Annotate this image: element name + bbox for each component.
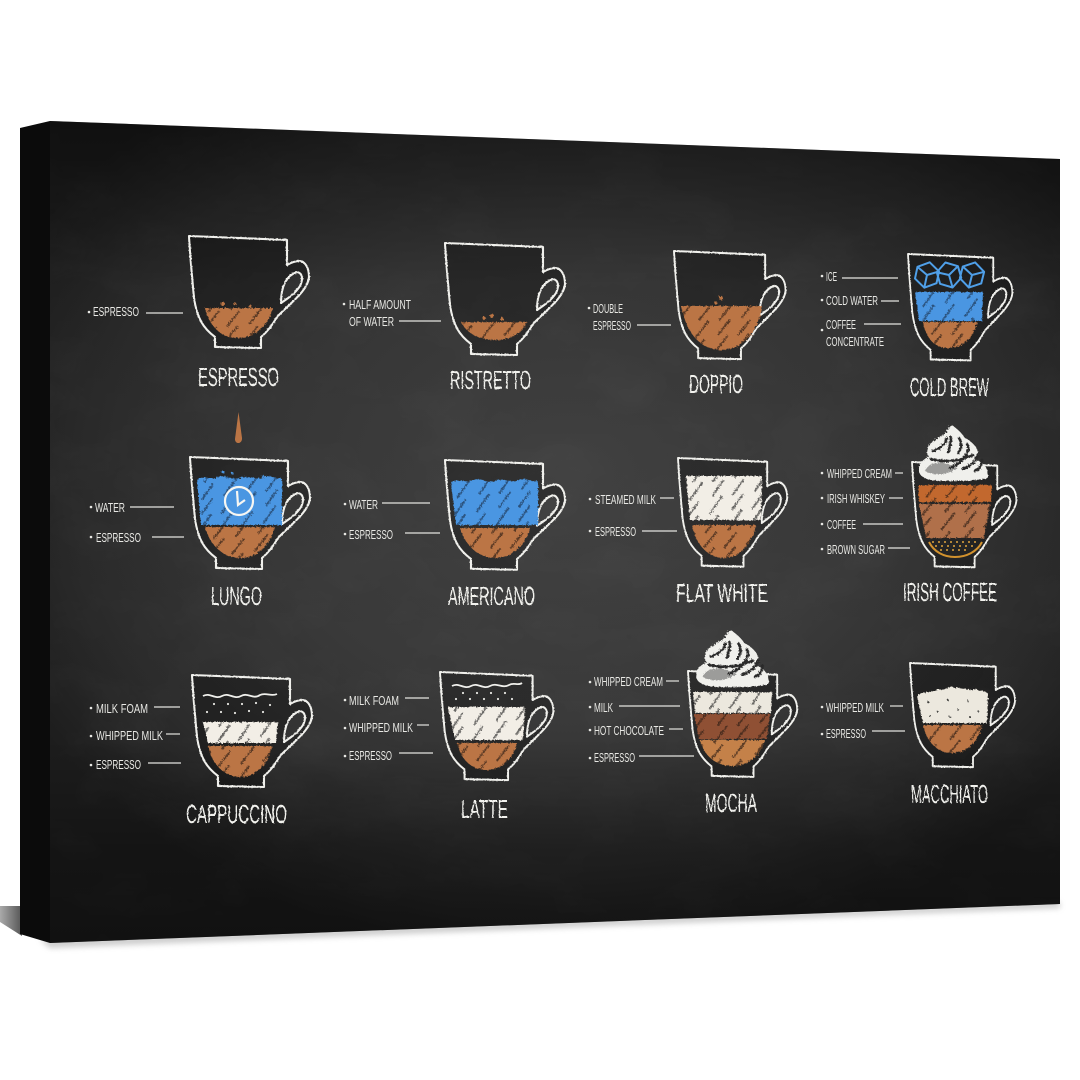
- label: espresso: ESPRESSO: [96, 530, 141, 545]
- label: water: WATER: [349, 497, 378, 512]
- label: coffee concentrate: CONCENTRATE: [826, 334, 884, 349]
- label: brown sugar: BROWN SUGAR: [827, 542, 885, 557]
- milk foam: [452, 683, 522, 700]
- cold water layer: [915, 292, 983, 321]
- label: espresso: ESPRESSO: [595, 524, 636, 539]
- title: CAPPUCCINO: [186, 799, 287, 829]
- cup outline: [688, 671, 797, 777]
- whipped milk layer: [203, 722, 278, 743]
- drink: irish coffee: [821, 425, 1016, 607]
- title: FLAT WHITE: [676, 578, 768, 608]
- label: espresso: ESPRESSO: [594, 750, 635, 765]
- label: milk foam: MILK FOAM: [349, 693, 399, 708]
- label: half amount of water: HALF AMOUNT: [349, 297, 411, 312]
- drink: lungo: [90, 412, 310, 611]
- drink: latte: [344, 672, 553, 824]
- label: water: [344, 497, 430, 512]
- label: half amount of water: OF WATER: [349, 314, 394, 329]
- milk layer: [693, 692, 772, 713]
- icon: ice cubes: [914, 259, 986, 291]
- espresso layer: [457, 743, 517, 770]
- brown sugar layer: [929, 541, 982, 557]
- coffee layer: [919, 504, 990, 538]
- coffee concentrate layer: [923, 322, 977, 348]
- label: espresso: ESPRESSO: [349, 748, 392, 763]
- drink: cappuccino: [90, 675, 312, 829]
- espresso layer: [923, 725, 982, 753]
- title: AMERICANO: [448, 581, 535, 611]
- drink: ristretto: [343, 243, 565, 395]
- drink: macchiato: [821, 663, 1015, 809]
- label: whipped cream: WHIPPED CREAM: [594, 674, 663, 689]
- label: half amount of water: [343, 297, 441, 329]
- label: espresso: ESPRESSO: [93, 304, 139, 319]
- espresso layer: [460, 528, 530, 558]
- label: double espresso: ESPRESSO: [593, 318, 631, 333]
- cup outline: [910, 663, 1015, 767]
- espresso layer: [461, 314, 527, 340]
- drink: doppio: [588, 251, 786, 399]
- label: irish whiskey: IRISH WHISKEY: [827, 491, 885, 506]
- title: RISTRETTO: [450, 365, 531, 395]
- label: cold water: COLD WATER: [826, 293, 878, 308]
- hot chocolate layer: [694, 714, 770, 739]
- whipped cream: [696, 630, 769, 687]
- label: water: WATER: [95, 500, 125, 515]
- icon: clock: [225, 487, 253, 515]
- title: ESPRESSO: [198, 362, 279, 392]
- label: coffee: [821, 517, 903, 532]
- label: whipped milk: WHIPPED MILK: [349, 720, 413, 735]
- drink: flat white: [589, 458, 787, 608]
- cup outline: [440, 672, 553, 780]
- drink: espresso: [88, 236, 309, 392]
- water layer: [197, 470, 282, 525]
- espresso layer: [208, 746, 272, 777]
- title: DOPPIO: [689, 369, 743, 399]
- chalkboard front panel: [50, 120, 1060, 945]
- milk foam: [203, 694, 277, 714]
- label: espresso: ESPRESSO: [826, 726, 866, 741]
- label: espresso: ESPRESSO: [349, 527, 393, 542]
- label: milk foam: MILK FOAM: [96, 701, 148, 716]
- label: whipped milk: WHIPPED MILK: [826, 700, 884, 715]
- irish whiskey layer: [918, 485, 992, 502]
- label: water: [90, 500, 174, 515]
- cup outline: [190, 457, 310, 569]
- whipped milk layer: [448, 707, 525, 740]
- title: LUNGO: [211, 581, 262, 611]
- canvas drop shadow: [0, 902, 1060, 948]
- icon: pouring drop: [235, 412, 242, 443]
- steamed milk layer: [686, 476, 762, 520]
- cup outline: [192, 675, 312, 787]
- cup outline: [674, 251, 786, 359]
- cup outline: [912, 462, 1016, 567]
- label: espresso: ESPRESSO: [96, 757, 141, 772]
- label: coffee concentrate: [821, 317, 901, 349]
- label: ice: ICE: [826, 269, 837, 284]
- label: steamed milk: STEAMED MILK: [595, 492, 656, 507]
- label: coffee concentrate: COFFEE: [826, 317, 856, 332]
- title: MACCHIATO: [911, 779, 988, 809]
- cup outline: [189, 236, 309, 348]
- espresso layer: [692, 525, 756, 558]
- label: coffee: COFFEE: [827, 517, 856, 532]
- label: milk: [589, 700, 680, 715]
- label: milk: MILK: [594, 700, 613, 715]
- label: double espresso: [588, 301, 671, 333]
- label: hot chocolate: HOT CHOCOLATE: [594, 723, 664, 738]
- title: LATTE: [461, 794, 508, 824]
- label: double espresso: DOUBLE: [593, 301, 623, 316]
- espresso layer: [205, 302, 273, 338]
- espresso layer: [205, 527, 275, 558]
- drink: americano: [344, 460, 565, 611]
- water layer: [451, 479, 538, 525]
- drink: cold brew: [821, 254, 1012, 402]
- cup outline: [445, 243, 565, 355]
- whipped milk layer: [917, 687, 988, 723]
- label: whipped cream: [821, 466, 903, 481]
- whipped cream: [919, 425, 988, 481]
- cup outline: [678, 458, 787, 567]
- title: MOCHA: [705, 788, 757, 818]
- espresso layer: [700, 740, 765, 766]
- cup outline: [445, 460, 565, 570]
- espresso layer: [681, 296, 762, 350]
- title: COLD BREW: [910, 372, 989, 402]
- label: ice: [821, 269, 898, 284]
- cup outline: [908, 254, 1012, 360]
- title: IRISH COFFEE: [903, 577, 997, 607]
- label: whipped cream: WHIPPED CREAM: [827, 466, 892, 481]
- label: espresso: [589, 750, 694, 765]
- drink: mocha: [589, 630, 797, 818]
- label: whipped milk: WHIPPED MILK: [96, 728, 163, 743]
- canvas side edge: [20, 121, 50, 943]
